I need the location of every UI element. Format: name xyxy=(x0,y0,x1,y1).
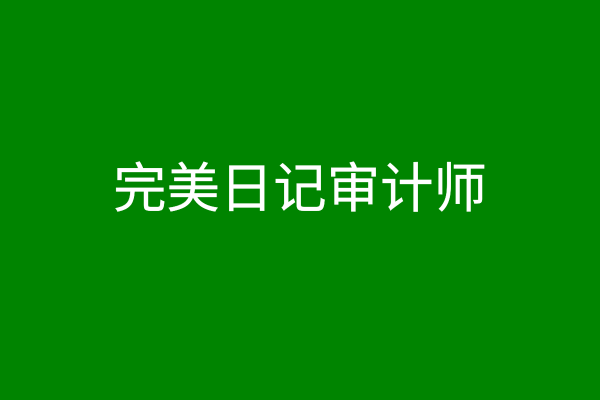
title: 完美日记审计师 xyxy=(113,160,487,219)
